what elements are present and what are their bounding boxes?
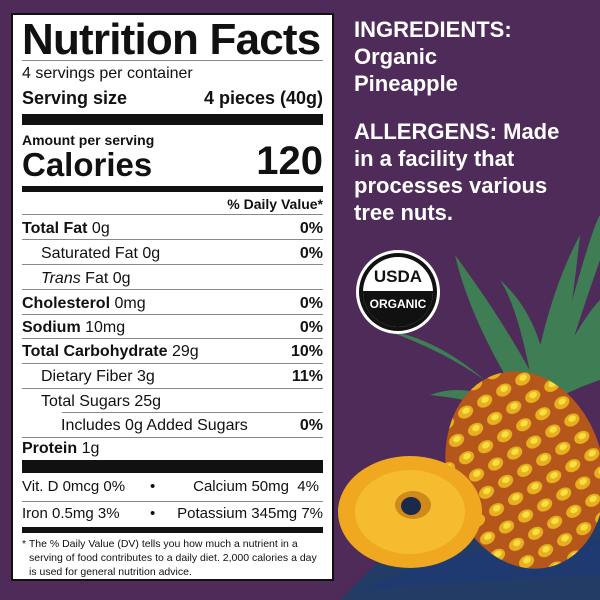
nutrient rows [22,220,323,237]
panel: nutrition facts label: 0% [300,245,323,262]
icon: USDA organic seal: ORGANIC [370,297,426,311]
nutrient rows: 0% [300,220,323,237]
calories: 120 [256,139,323,183]
ingredients text [354,17,512,96]
allergens text: in a facility that [354,146,514,171]
icon: USDA organic seal [356,250,440,334]
pineapple leaves [385,215,600,415]
allergens text [354,119,559,225]
panel: nutrition facts label: Potassium 345mg 7% [177,505,323,522]
panel: nutrition facts label [11,13,334,581]
allergens text: processes various [354,173,547,198]
panel: nutrition facts label: • [150,505,155,522]
calories: Calories [22,146,152,183]
serving size: 4 pieces (40g) [204,88,323,108]
ingredients text: Organic [354,44,437,69]
panel: nutrition facts label: Includes 0g Added Sugars [61,417,248,434]
panel: nutrition facts label: Total Carbohydrate 29g [22,343,199,360]
panel: nutrition facts label: 10% [291,343,323,360]
ingredients text: Pineapple [354,71,458,96]
allergens text: tree nuts. [354,200,453,225]
pineapple ring [338,456,482,568]
serving size [22,88,323,108]
ingredients text: INGREDIENTS: [354,17,512,42]
calories [22,139,323,183]
icon: USDA organic seal: USDA [374,267,422,286]
vitamins: • [150,478,155,495]
panel: nutrition facts label: Protein 1g [22,440,99,457]
amount per serving: Amount per serving [22,132,154,148]
panel: nutrition facts label: 0% [300,319,323,336]
panel: nutrition facts label: Trans Fat 0g [41,270,131,287]
pineapple body [424,353,600,587]
title: Nutrition Facts [22,15,320,64]
panel: nutrition facts label: 0% [300,417,323,434]
panel: nutrition facts label: Dietary Fiber 3g [41,368,155,385]
serving size: Serving size [22,88,127,108]
footnote: * The % Daily Value (DV) tells you how much a nutrient in a serving of food contributes to a daily diet. 2,000 calories a day is used for general nutrition advice. [22,538,317,578]
panel: nutrition facts label: 0% [300,295,323,312]
servings per container: 4 servings per container [22,65,193,82]
panel: nutrition facts label: Saturated Fat 0g [41,245,160,262]
allergens text: ALLERGENS: Made [354,119,559,144]
vitamins: Calcium 50mg 4% [193,478,319,495]
panel: nutrition facts label: Cholesterol 0mg [22,295,146,312]
panel: nutrition facts label: % Daily Value* [227,196,323,212]
panel: nutrition facts label: Sodium 10mg [22,319,125,336]
vitamins: Vit. D 0mcg 0% [22,478,125,495]
panel: nutrition facts label: 11% [292,368,323,385]
panel: nutrition facts label: Total Sugars 25g [41,393,161,410]
nutrient rows: Total Fat 0g [22,220,110,237]
vitamins [22,478,319,495]
panel: nutrition facts label: Iron 0.5mg 3% [22,505,120,522]
blue leaves [340,500,600,600]
